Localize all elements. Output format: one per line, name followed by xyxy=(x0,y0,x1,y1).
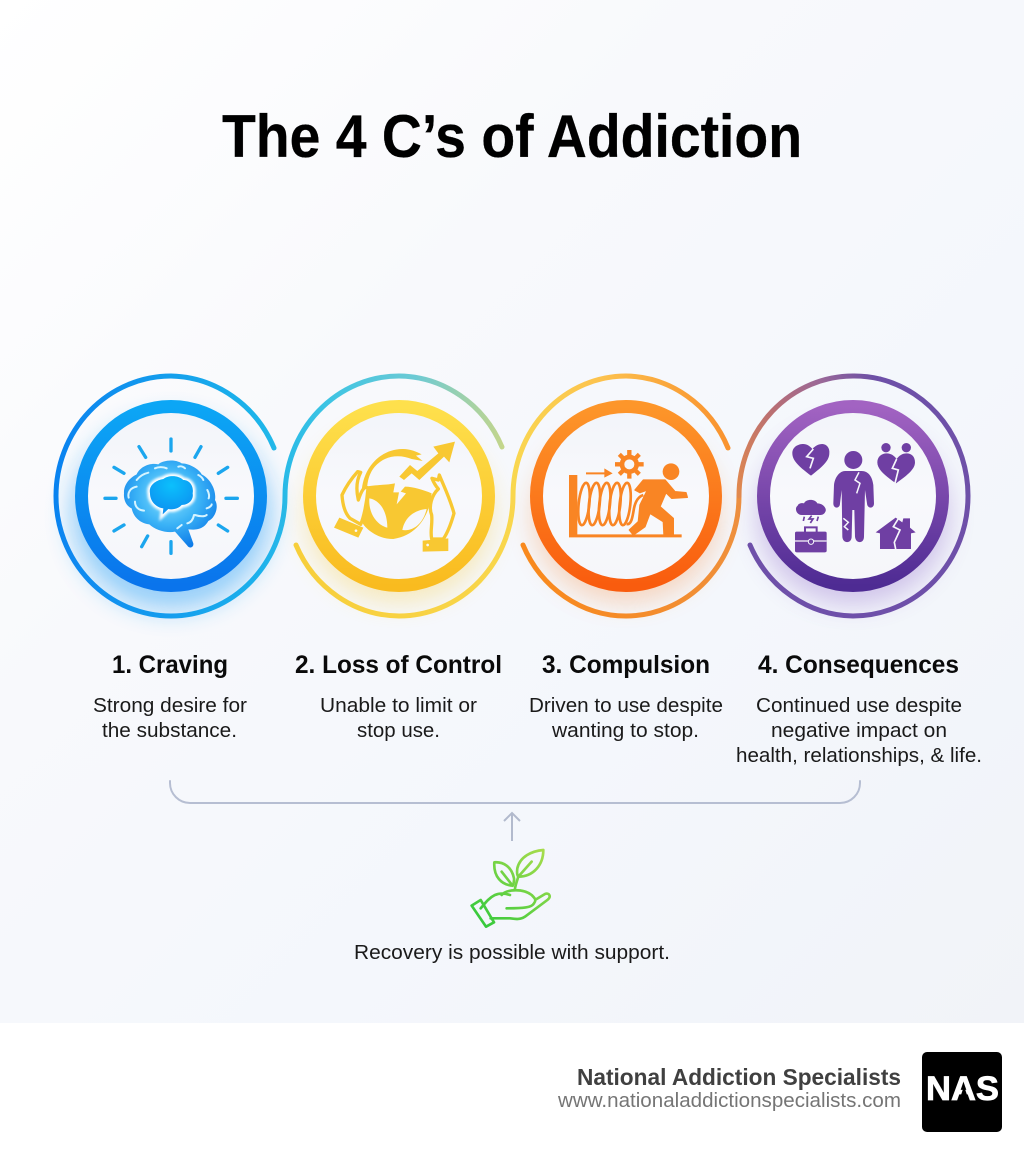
text block: consequences description: health, relationships, & life. xyxy=(736,745,982,767)
icon: glowing brain xyxy=(105,439,237,553)
text block: compulsion description: Driven to use despite xyxy=(529,695,723,717)
title: The 4 C’s of Addiction xyxy=(222,103,802,170)
connected flowing line: orange to purple xyxy=(523,376,968,616)
heading: 4. Consequences: 4. Consequences xyxy=(758,651,959,679)
panel: compulsion circle xyxy=(532,406,720,603)
logo: NAS xyxy=(922,1052,1002,1132)
text block: consequences description: negative impact on xyxy=(771,720,947,742)
icon: seedling in open hand xyxy=(472,850,550,927)
text block: consequences description: Continued use despite xyxy=(756,695,962,717)
panel: loss of control circle xyxy=(305,406,493,603)
text block: craving description xyxy=(93,695,247,742)
icon: coil, gear and running figure xyxy=(569,450,687,537)
footer website: www.nationaladdictionspecialists.com xyxy=(557,1090,901,1112)
bracket joining the four stages xyxy=(170,781,860,803)
text block: compulsion description xyxy=(529,695,723,742)
text block: loss of control description: Unable to limit or xyxy=(320,695,477,717)
panel: consequences circle xyxy=(757,406,949,605)
footer bar xyxy=(0,1023,1024,1154)
icon: breaking steering wheel in hands xyxy=(334,442,455,552)
text block: loss of control description xyxy=(320,695,477,742)
connected flowing line: yellow to orange xyxy=(296,376,728,616)
connected flowing line: blue to green xyxy=(56,376,502,616)
panel: craving circle xyxy=(71,406,271,610)
text block: recovery message: Recovery is possible with support. xyxy=(354,942,670,964)
arrow: up to recovery xyxy=(504,813,520,841)
footer organisation name: National Addiction Specialists xyxy=(577,1064,901,1090)
text block: craving description: the substance. xyxy=(102,720,237,742)
heading: 1. Craving: 1. Craving xyxy=(112,651,228,679)
heading: 3. Compulsion: 3. Compulsion xyxy=(542,651,710,679)
text block: craving description: Strong desire for xyxy=(93,695,247,717)
text block: loss of control description: stop use. xyxy=(357,720,440,742)
icon: broken heart, figure, job and home xyxy=(792,443,916,552)
logo: NAS: NAS xyxy=(926,1070,999,1108)
text block: consequences description xyxy=(736,695,982,767)
heading: 2. Loss of Control: 2. Loss of Control xyxy=(295,651,502,679)
text block: compulsion description: wanting to stop. xyxy=(551,720,699,742)
